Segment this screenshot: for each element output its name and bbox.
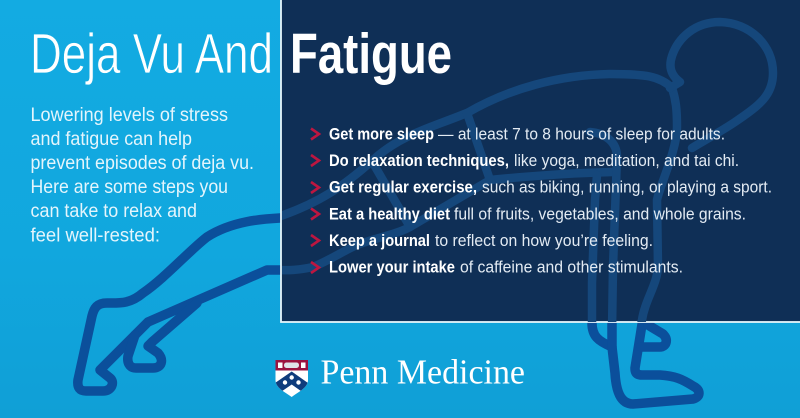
tip: diet (311, 205, 746, 223)
tip: sleep: Get more sleep (329, 125, 434, 143)
tip: sleep (311, 125, 725, 143)
tips list (311, 125, 772, 277)
intro paragraph: Here are some steps you (30, 176, 228, 198)
tip: relaxation: Do relaxation techniques, (329, 152, 509, 170)
tip: diet: full of fruits, vegetables, and whole grains. (454, 205, 746, 223)
figure outline inside panel (275, 22, 773, 330)
logo: Penn Medicine (276, 359, 524, 397)
intro paragraph: Lowering levels of stress (30, 104, 228, 126)
title: Deja Vu And (30, 22, 273, 86)
intro paragraph (30, 104, 254, 246)
tip: intake (311, 259, 683, 277)
tip: intake: of caffeine and other stimulants. (460, 259, 683, 277)
logo wordmark: Penn Medicine (320, 352, 525, 392)
tip: journal (311, 232, 653, 250)
tip: exercise: such as biking, running, or playing a sport. (482, 179, 772, 197)
intro paragraph: and fatigue can help (30, 128, 192, 150)
tip: relaxation (311, 152, 739, 170)
tip: relaxation: like yoga, meditation, and tai chi. (514, 152, 739, 170)
panel: dark navy tips box (281, 0, 800, 322)
tip: exercise: Get regular exercise, (329, 179, 477, 197)
tip: journal: to reflect on how you’re feeling. (435, 232, 653, 250)
title: Fatigue (290, 22, 452, 86)
icon: Penn shield (275, 360, 309, 398)
intro paragraph: feel well-rested: (30, 224, 160, 246)
figure outline: person stretching (78, 218, 699, 404)
tip: journal: Keep a journal (329, 232, 430, 250)
tip: intake: Lower your intake (329, 259, 455, 277)
tip: sleep: — at least 7 to 8 hours of sleep for adults. (438, 125, 725, 143)
tip: exercise (311, 179, 772, 197)
intro paragraph: prevent episodes of deja vu. (30, 152, 254, 174)
intro paragraph: can take to relax and (30, 200, 197, 222)
tip: diet: Eat a healthy diet (329, 205, 450, 223)
